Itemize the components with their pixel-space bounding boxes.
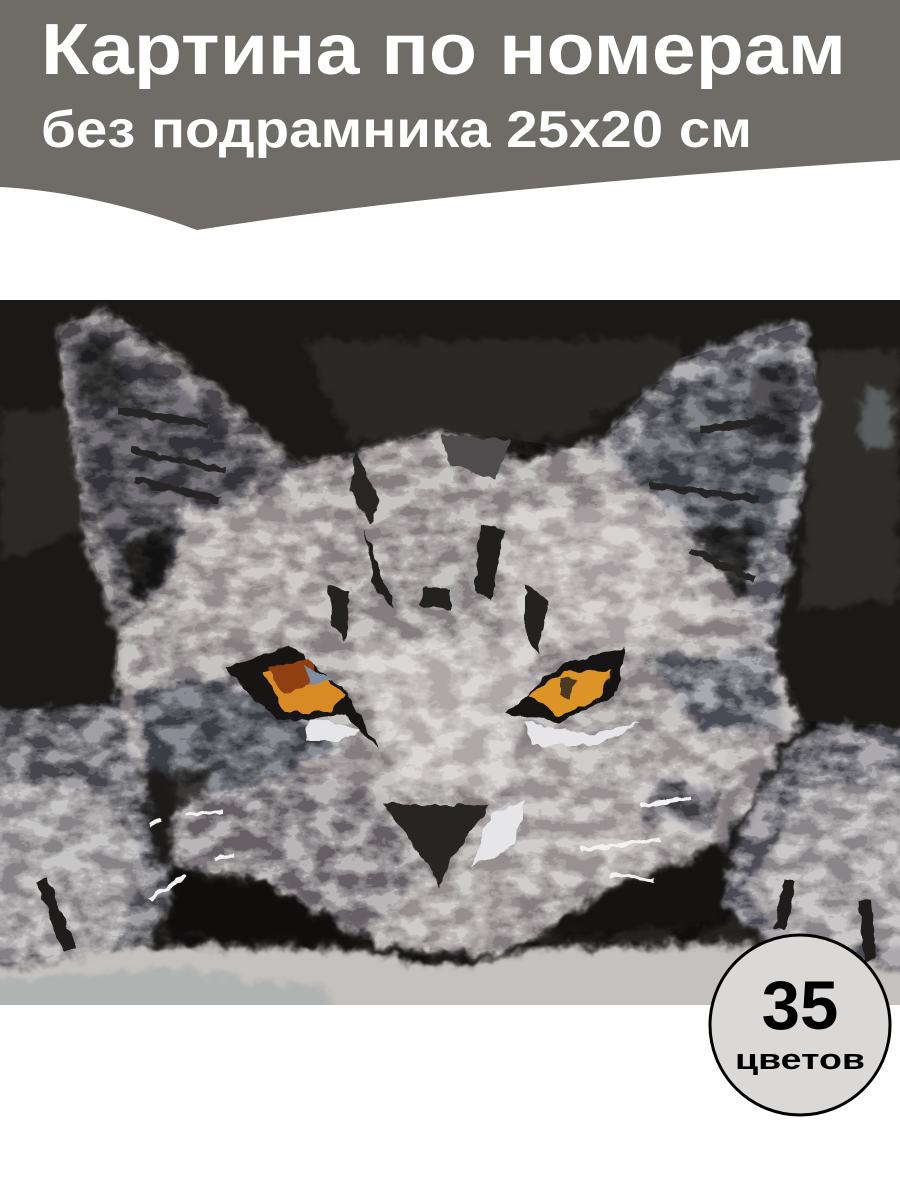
- right paw: [715, 725, 900, 975]
- ledge and shadows above texture: [0, 766, 900, 1005]
- claws: [42, 880, 870, 960]
- left eye: [225, 645, 380, 750]
- right ear: [591, 317, 825, 646]
- painting: cat: [0, 300, 900, 1040]
- nose: [382, 803, 490, 888]
- whiskers: [150, 798, 690, 900]
- subtitle: без подрамника 25х20 см: [41, 101, 752, 159]
- badge label: цветов: [735, 1044, 865, 1076]
- muzzle highlights: [305, 718, 640, 866]
- forehead stripes: [328, 435, 548, 655]
- header banner: [0, 0, 900, 230]
- badge: 35 colors: [710, 935, 890, 1115]
- ear stripes: [120, 410, 770, 580]
- title: Картина по номерам: [41, 10, 846, 90]
- head: [115, 430, 800, 955]
- dark under chin: [168, 870, 365, 945]
- facial details: [42, 410, 870, 960]
- paint texture: [0, 308, 900, 1040]
- background patches: [0, 340, 900, 610]
- ledge: [0, 934, 900, 1005]
- right eye: [505, 648, 625, 722]
- cat body: [0, 308, 900, 975]
- gap between cheek and paw: [140, 770, 175, 870]
- left paw: [0, 705, 175, 975]
- badge number: 35: [762, 967, 838, 1044]
- head highlights: [500, 500, 710, 650]
- left ear: [56, 308, 360, 660]
